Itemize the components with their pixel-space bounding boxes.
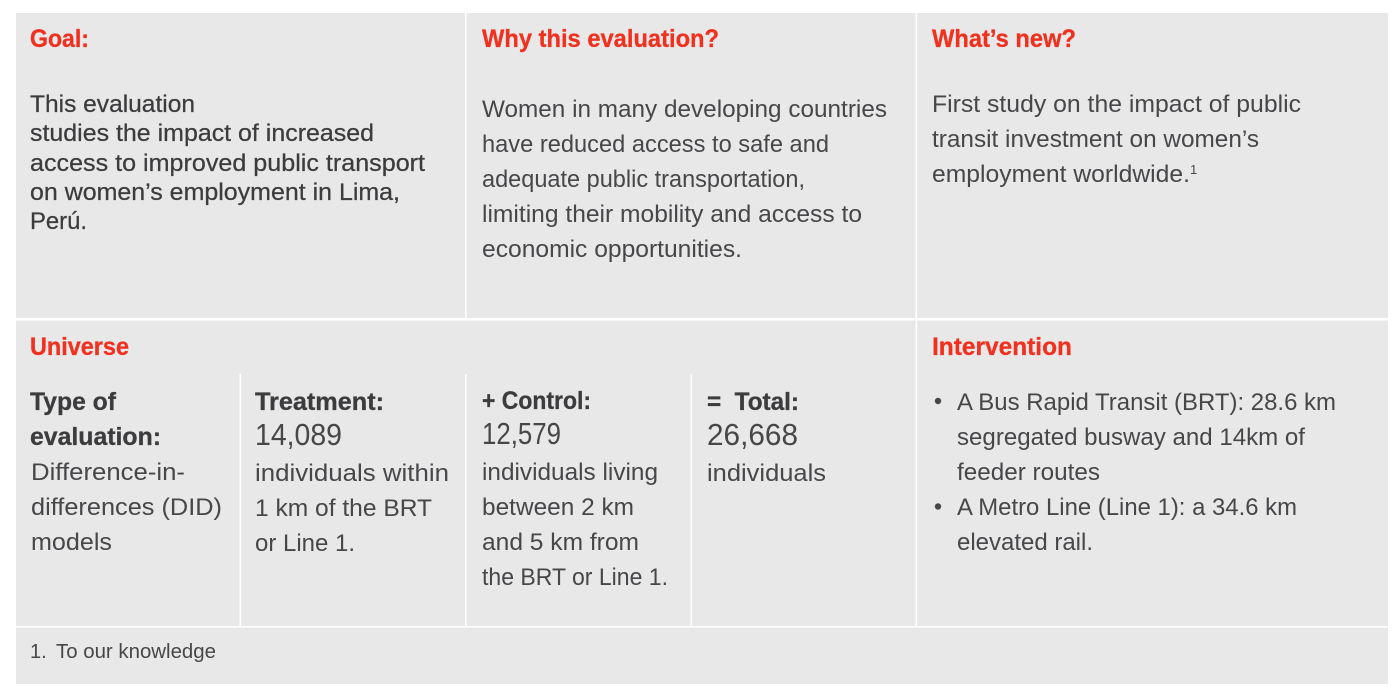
column: type of evaluation: evaluation: <box>30 423 161 451</box>
text block: what's new description: 1 <box>1190 162 1197 177</box>
column: treatment: 1 km of the BRT <box>255 495 432 522</box>
column: treatment <box>255 388 449 557</box>
column: control: between 2 km <box>482 494 634 521</box>
text block: why description <box>482 96 887 263</box>
list item: metro line <box>935 494 1297 556</box>
column: type of evaluation: Type of <box>30 388 117 416</box>
column: control: individuals living <box>482 459 658 486</box>
text block: goal description: access to improved public transport <box>30 150 425 177</box>
panel: why this evaluation <box>482 25 887 263</box>
column: treatment: individuals within <box>255 460 449 487</box>
column: control <box>482 387 668 591</box>
column: type of evaluation: models <box>31 529 112 556</box>
panel: universe <box>30 333 826 591</box>
text block: what's new description <box>932 91 1301 188</box>
text block: why description: Women in many developing countries <box>482 96 887 123</box>
column: control: + Control: <box>482 387 591 415</box>
text block: goal description <box>30 91 425 235</box>
heading: why this evaluation: Why this evaluation? <box>482 25 719 53</box>
column: total: 26,668 <box>707 417 798 452</box>
column: total: individuals <box>707 460 826 487</box>
text block: goal description: Perú. <box>30 208 87 235</box>
column: control: and 5 km from <box>482 529 639 556</box>
footnote: 1. <box>30 641 47 663</box>
list item: metro line: A Metro Line (Line 1): a 34.6 km <box>957 494 1297 521</box>
text block: what's new description: First study on the impact of public <box>932 91 1301 118</box>
list item: metro line: elevated rail. <box>957 529 1093 556</box>
list item: bus rapid transit <box>935 389 1336 486</box>
text block: what's new description: employment worldwide. <box>932 161 1190 188</box>
column: total: = Total: <box>707 388 799 416</box>
text block: goal description: studies the impact of increased <box>30 120 374 147</box>
text block: why description: adequate public transportation, <box>482 166 805 193</box>
panel: intervention <box>932 333 1336 556</box>
text block: why description: limiting their mobility and access to <box>482 201 862 228</box>
column: type of evaluation <box>30 388 222 556</box>
column: type of evaluation: Difference-in- <box>31 459 185 486</box>
column: treatment: Treatment: <box>255 388 384 416</box>
heading: what's new: What’s new? <box>932 25 1076 53</box>
column: treatment: 14,089 <box>255 417 342 452</box>
text block: goal description: on women’s employment in Lima, <box>30 179 400 206</box>
panel: goal <box>30 25 425 235</box>
list item: bus rapid transit: A Bus Rapid Transit (BRT): 28.6 km <box>957 389 1336 416</box>
column: total <box>707 388 826 487</box>
footnote: To our knowledge <box>56 641 216 663</box>
list item: bus rapid transit: segregated busway and 14km of <box>957 424 1305 451</box>
text block: why description: have reduced access to safe and <box>482 131 829 158</box>
column: type of evaluation: differences (DID) <box>31 494 222 521</box>
column: control: 12,579 <box>482 416 561 451</box>
column: treatment: or Line 1. <box>255 530 355 557</box>
heading: intervention: Intervention <box>932 333 1072 361</box>
heading: goal: Goal: <box>30 25 89 53</box>
column: control: the BRT or Line 1. <box>482 564 668 591</box>
text block: goal description: This evaluation <box>30 91 195 118</box>
panel: what's new <box>932 25 1301 188</box>
list item: bus rapid transit: feeder routes <box>957 459 1100 486</box>
text block: what's new description: transit investment on women’s <box>932 126 1259 153</box>
text block: why description: economic opportunities. <box>482 236 742 263</box>
heading: universe: Universe <box>30 333 129 361</box>
